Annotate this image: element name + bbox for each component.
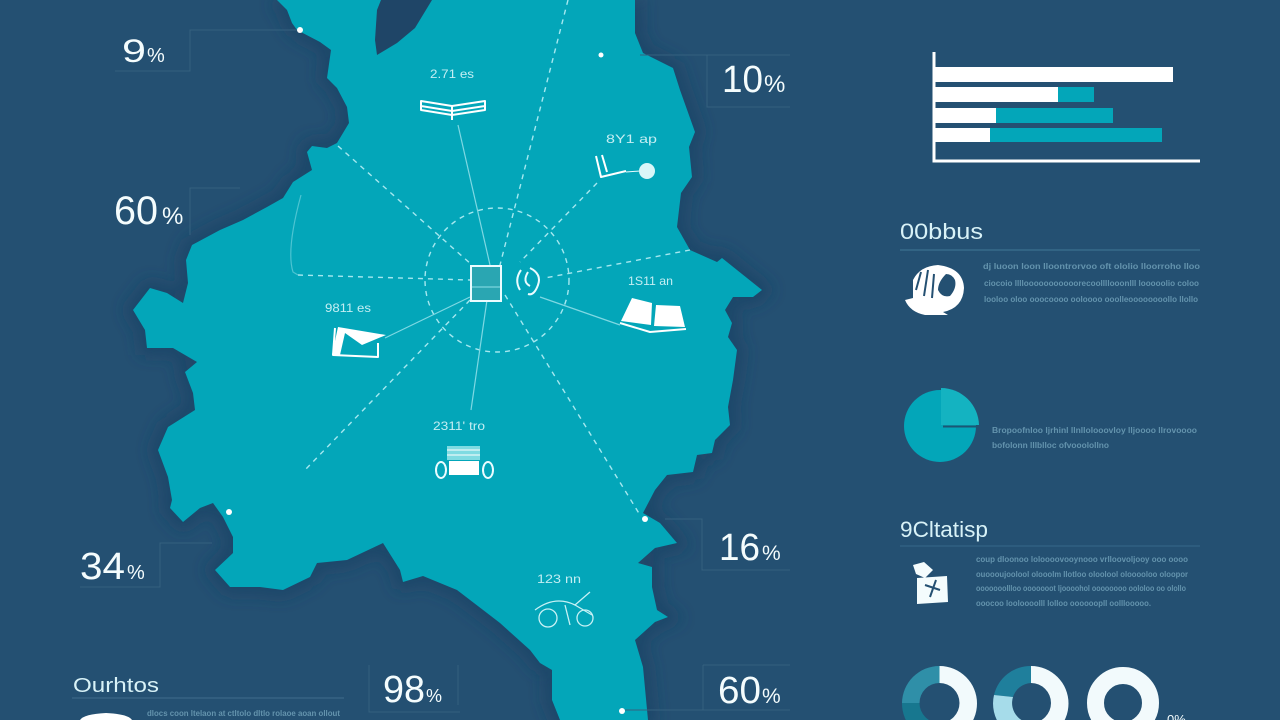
panel: scratist: 9Cltatisp bbox=[900, 517, 988, 542]
panel: oobbus: dj luoon loon lloontrorvoo oft ololio lloorroho lloo bbox=[983, 261, 1200, 271]
stat: 60% bottom: 60 bbox=[718, 670, 761, 712]
stat: 10%: % bbox=[764, 71, 785, 98]
map label: east book: 1S11 an bbox=[628, 274, 673, 288]
stat: 98%: 98 bbox=[383, 669, 425, 711]
stat: 60% left: % bbox=[162, 203, 183, 230]
stat: 16%: 16 bbox=[719, 527, 760, 569]
stat: 9% bbox=[115, 30, 297, 71]
hub icon bbox=[471, 266, 539, 301]
donut chart 1 bbox=[902, 666, 977, 720]
stat: 34% bbox=[80, 543, 212, 588]
stat: 10% bbox=[640, 55, 790, 107]
network lines bbox=[291, 0, 690, 515]
pie chart caption: Bropoofnloo ljrhinl llnllolooovloy lljoooo llrovoooo bbox=[992, 425, 1197, 435]
stat: 60% bottom bbox=[625, 665, 790, 712]
donut chart 3 bbox=[1096, 676, 1186, 720]
panel: bottom-left heading: Ourhtos bbox=[73, 675, 159, 697]
stat: 60% left bbox=[114, 188, 240, 235]
icon: box with gears bbox=[913, 562, 948, 604]
panel: scratist: coup dloonoo loloooovooynooo vrlloovoljooy ooo oooo bbox=[976, 554, 1188, 564]
map label: west envelope bbox=[325, 301, 386, 357]
stat: 98%: % bbox=[426, 686, 442, 706]
map label: north-east icon: 8Y1 ap bbox=[606, 132, 657, 146]
pie chart caption: bofolonn lllblloc ofvooolollno bbox=[992, 440, 1109, 450]
stat: 10%: 10 bbox=[722, 59, 763, 101]
map label: north book bbox=[421, 67, 485, 120]
panel: scratist: ooocoo looloooolll lolloo oooooopll oolllooooo. bbox=[976, 598, 1151, 608]
stat: 60% left: 60 bbox=[114, 189, 158, 233]
pie chart bbox=[904, 388, 979, 462]
pie chart caption bbox=[992, 425, 1197, 450]
connector dots bbox=[226, 27, 648, 714]
stat: 16% bbox=[665, 519, 790, 570]
panel: bottom-left heading bbox=[72, 675, 344, 720]
map label: west envelope: 9811 es bbox=[325, 301, 371, 315]
map label: south cart bbox=[433, 419, 493, 478]
icon: hand and globe bbox=[905, 265, 964, 315]
stat: 34%: % bbox=[127, 562, 145, 584]
panel: oobbus: looloo oloo ooocoooo ooloooo ooolleoooooooollo llollo bbox=[984, 294, 1198, 304]
map silhouette bbox=[133, 0, 762, 720]
stat: 9%: % bbox=[147, 45, 165, 67]
panel: oobbus: 00bbus bbox=[900, 219, 983, 244]
panel: bottom-left heading: dlocs coon ltelaon at ctltolo dltlo rolaoe aoan ollout bbox=[147, 708, 340, 718]
bar chart bbox=[934, 52, 1200, 161]
map label: east book bbox=[620, 274, 686, 332]
stat: 16%: % bbox=[762, 542, 781, 565]
stat: 60% bottom: % bbox=[762, 685, 781, 708]
donut chart 2 bbox=[993, 666, 1068, 720]
lake bbox=[375, 0, 432, 55]
panel: scratist: ouoooujoolool olooolm llotloo oloolool olooooloo oloopor bbox=[976, 569, 1189, 579]
stat: 34%: 34 bbox=[80, 546, 125, 588]
map label: motorcycle bbox=[535, 572, 593, 627]
panel: oobbus bbox=[900, 219, 1200, 315]
stat: 98% bbox=[369, 665, 460, 712]
map label: north book: 2.71 es bbox=[430, 67, 474, 81]
stat: 9%: 9 bbox=[122, 33, 146, 69]
panel: oobbus: ciocoio llllooooooooooorecoollllooonlll looooolio coloo bbox=[984, 278, 1199, 288]
map label: south cart: 2311' tro bbox=[433, 419, 485, 433]
panel: scratist: ooooooollloo ooooooot ljoooohol oooooooo oololoo oo olollo bbox=[976, 583, 1186, 593]
panel: scratist bbox=[900, 517, 1200, 608]
map label: north-east icon bbox=[596, 132, 657, 179]
map shadow bbox=[133, 0, 762, 720]
map label: motorcycle: 123 nn bbox=[537, 572, 581, 586]
